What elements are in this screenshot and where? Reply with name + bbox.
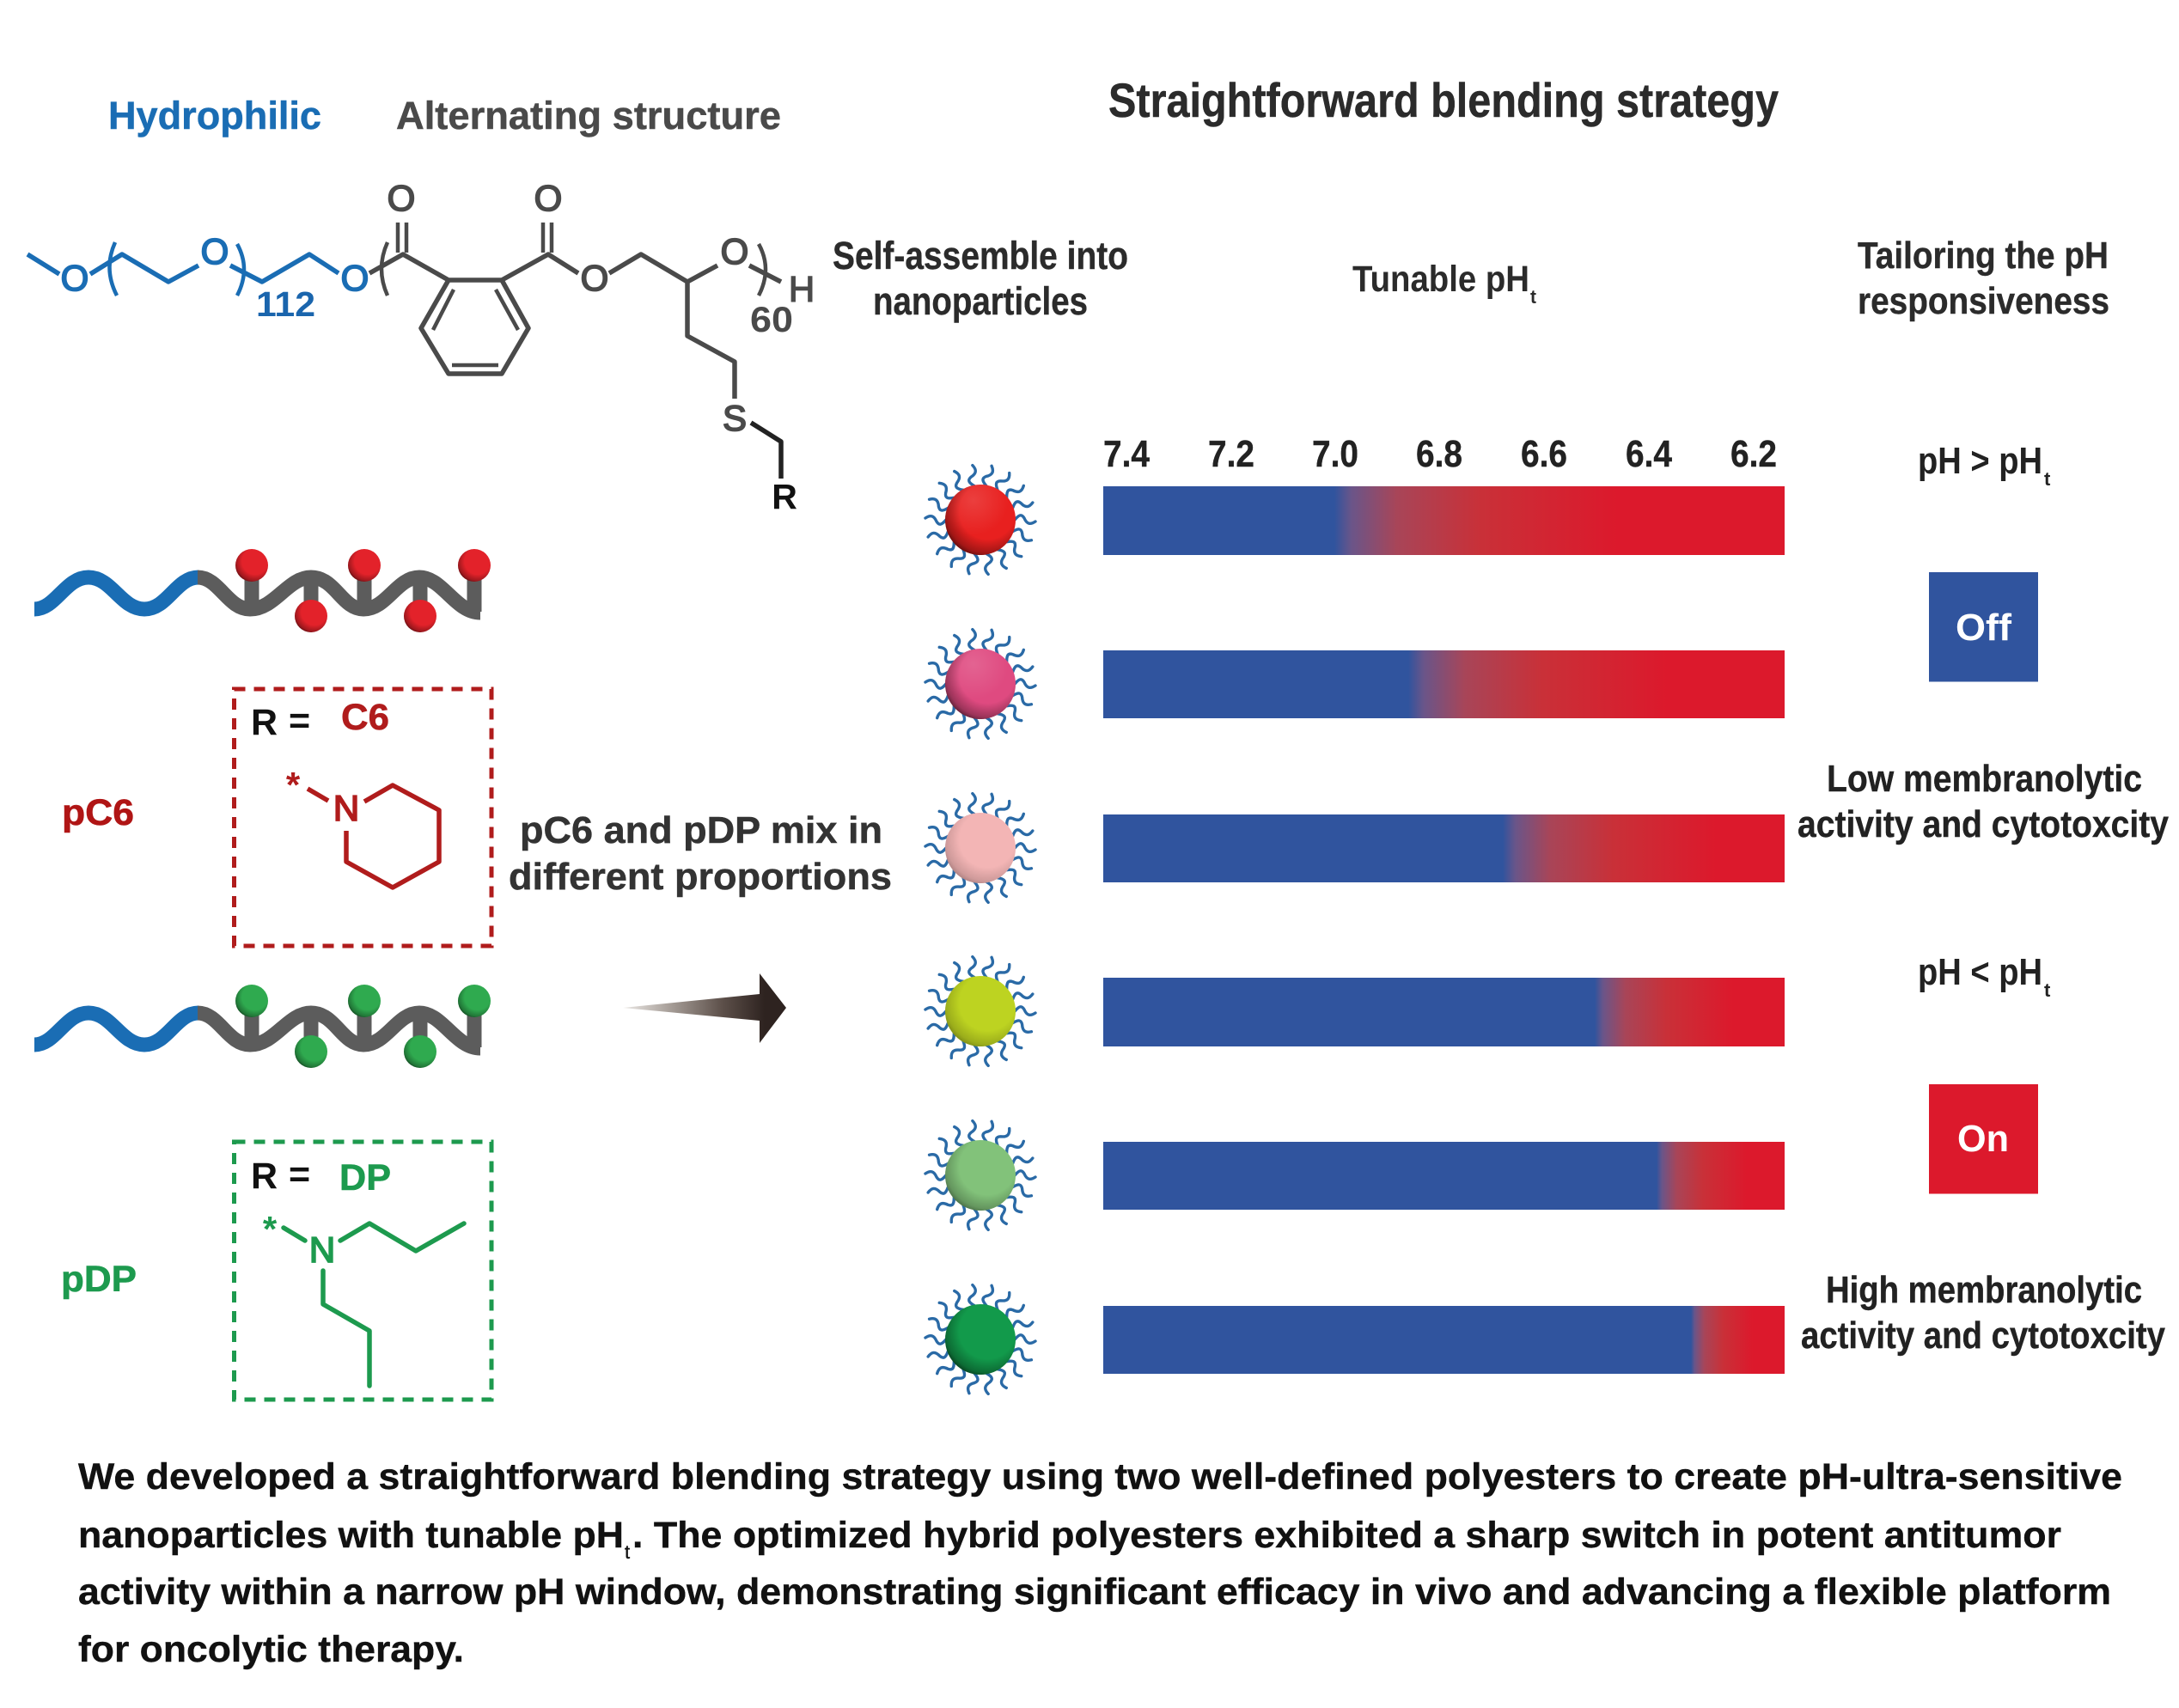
alternating polyester segment: O xyxy=(581,258,608,298)
title: Straightforward blending strategy xyxy=(1108,73,1779,127)
label: pH > pHt: pH > pH xyxy=(1918,440,2042,482)
chemical structure xyxy=(27,178,815,516)
label: pH < pHt: pH < pH xyxy=(1918,951,2042,993)
state: Off xyxy=(1929,572,2038,682)
hydrophilic PEG segment xyxy=(27,231,369,324)
nanoparticle row 6 xyxy=(925,1284,1035,1394)
nanoparticle row 3 xyxy=(925,793,1035,903)
pH axis labels: 7.4 xyxy=(1103,433,1150,475)
arrow xyxy=(623,973,786,1043)
pH axis labels xyxy=(1103,433,1777,475)
nanoparticle row 4 xyxy=(925,956,1035,1066)
polymer chain: pDP (green) xyxy=(34,985,491,1068)
structure: dipropylamine: N xyxy=(309,1229,335,1270)
alternating polyester segment: S xyxy=(723,398,747,438)
alternating polyester segment: H xyxy=(789,269,815,309)
structure: piperidine: N xyxy=(333,788,359,828)
panel: R = DP dashed box: DP xyxy=(339,1157,391,1199)
pH axis labels: 6.8 xyxy=(1416,433,1462,475)
alternating polyester segment: O xyxy=(721,231,748,271)
panel: R = C6 dashed box xyxy=(234,689,491,946)
column heading: tunable pHt: t xyxy=(1530,286,1537,308)
column heading: self-assemble xyxy=(833,234,1128,323)
column heading: tailoring xyxy=(1858,235,2109,322)
column heading: tunable pHt: Tunable pH xyxy=(1352,259,1529,300)
bar row 5 xyxy=(1103,1142,1785,1210)
structure: dipropylamine: * xyxy=(263,1209,278,1249)
column heading: self-assemble: nanoparticles xyxy=(873,279,1088,323)
bar row 4 xyxy=(1103,978,1785,1046)
hydrophilic PEG segment: O xyxy=(341,258,369,298)
text: mixing note xyxy=(509,809,892,898)
panel: R = C6 dashed box: = xyxy=(289,700,310,741)
column heading: self-assemble: Self-assemble into xyxy=(833,234,1128,278)
pH axis labels: 6.6 xyxy=(1521,433,1567,475)
bar row 3 xyxy=(1103,814,1785,882)
alternating polyester segment: O xyxy=(388,178,415,218)
panel: R = DP dashed box xyxy=(234,1142,491,1400)
alternating polyester segment xyxy=(369,178,815,516)
summary paragraph: for oncolytic therapy. xyxy=(78,1629,464,1670)
panel: R = C6 dashed box: C6 xyxy=(341,697,389,738)
pH axis labels: 6.2 xyxy=(1730,433,1777,475)
hydrophilic PEG segment: O xyxy=(201,231,229,271)
nanoparticle row 1 xyxy=(925,465,1035,575)
alternating polyester segment: R xyxy=(772,477,797,516)
text: high activity: High membranolytic xyxy=(1826,1269,2142,1311)
label: pDP: pDP xyxy=(61,1259,137,1300)
pH axis labels: 7.0 xyxy=(1312,433,1358,475)
panel: R = C6 dashed box: R xyxy=(251,702,278,743)
hydrophilic PEG segment: 112 xyxy=(256,284,315,324)
summary paragraph: . The optimized hybrid polyesters exhibited a sharp switch in potent antitumor xyxy=(632,1515,2061,1556)
label: pH > pHt: t xyxy=(2044,468,2051,490)
pH axis labels: 7.2 xyxy=(1208,433,1254,475)
bar row 6 xyxy=(1103,1306,1785,1374)
text: low activity: Low membranolytic xyxy=(1827,758,2142,800)
column heading: tailoring: responsiveness xyxy=(1858,280,2109,322)
summary paragraph: nanoparticles with tunable pH xyxy=(78,1515,624,1556)
hydrophilic PEG segment: O xyxy=(61,258,89,298)
alternating polyester segment: 60 xyxy=(750,299,793,339)
polymer chain: pC6 (red) xyxy=(34,549,491,632)
bar row 1 xyxy=(1103,486,1785,555)
label: pH < pHt: t xyxy=(2044,979,2051,1001)
alternating polyester segment: O xyxy=(534,178,562,218)
panel: R = DP dashed box: R xyxy=(251,1156,278,1197)
structure: piperidine xyxy=(286,765,439,888)
summary paragraph xyxy=(78,1456,2122,1670)
nanoparticle row 5 xyxy=(925,1120,1035,1230)
state: On xyxy=(1929,1084,2038,1194)
bar row 2 xyxy=(1103,650,1785,718)
nanoparticle row 2 xyxy=(925,629,1035,739)
pH axis labels: 6.4 xyxy=(1626,433,1672,475)
column heading: tailoring: Tailoring the pH xyxy=(1858,235,2109,277)
state: On: On xyxy=(1957,1118,2009,1160)
structure: piperidine: * xyxy=(286,765,301,805)
heading: Hydrophilic: Hydrophilic xyxy=(108,94,321,137)
state: Off: Off xyxy=(1956,607,2011,649)
label: pC6: pC6 xyxy=(62,792,134,833)
summary paragraph: We developed a straightforward blending strategy using two well-defined polyesters to create pH-ultra-sensitive xyxy=(78,1456,2122,1498)
structure: dipropylamine xyxy=(263,1209,464,1386)
panel: R = DP dashed box: = xyxy=(289,1154,310,1195)
text: low activity xyxy=(1798,758,2169,845)
heading: Alternating structure: Alternating structure xyxy=(396,94,781,137)
summary paragraph: t xyxy=(625,1541,630,1563)
text: mixing note: pC6 and pDP mix in xyxy=(520,809,882,851)
text: mixing note: different proportions xyxy=(509,856,892,898)
summary paragraph: activity within a narrow pH window, demonstrating significant efficacy in vivo and advancing a flexible platform xyxy=(78,1571,2111,1613)
text: high activity xyxy=(1801,1269,2165,1357)
